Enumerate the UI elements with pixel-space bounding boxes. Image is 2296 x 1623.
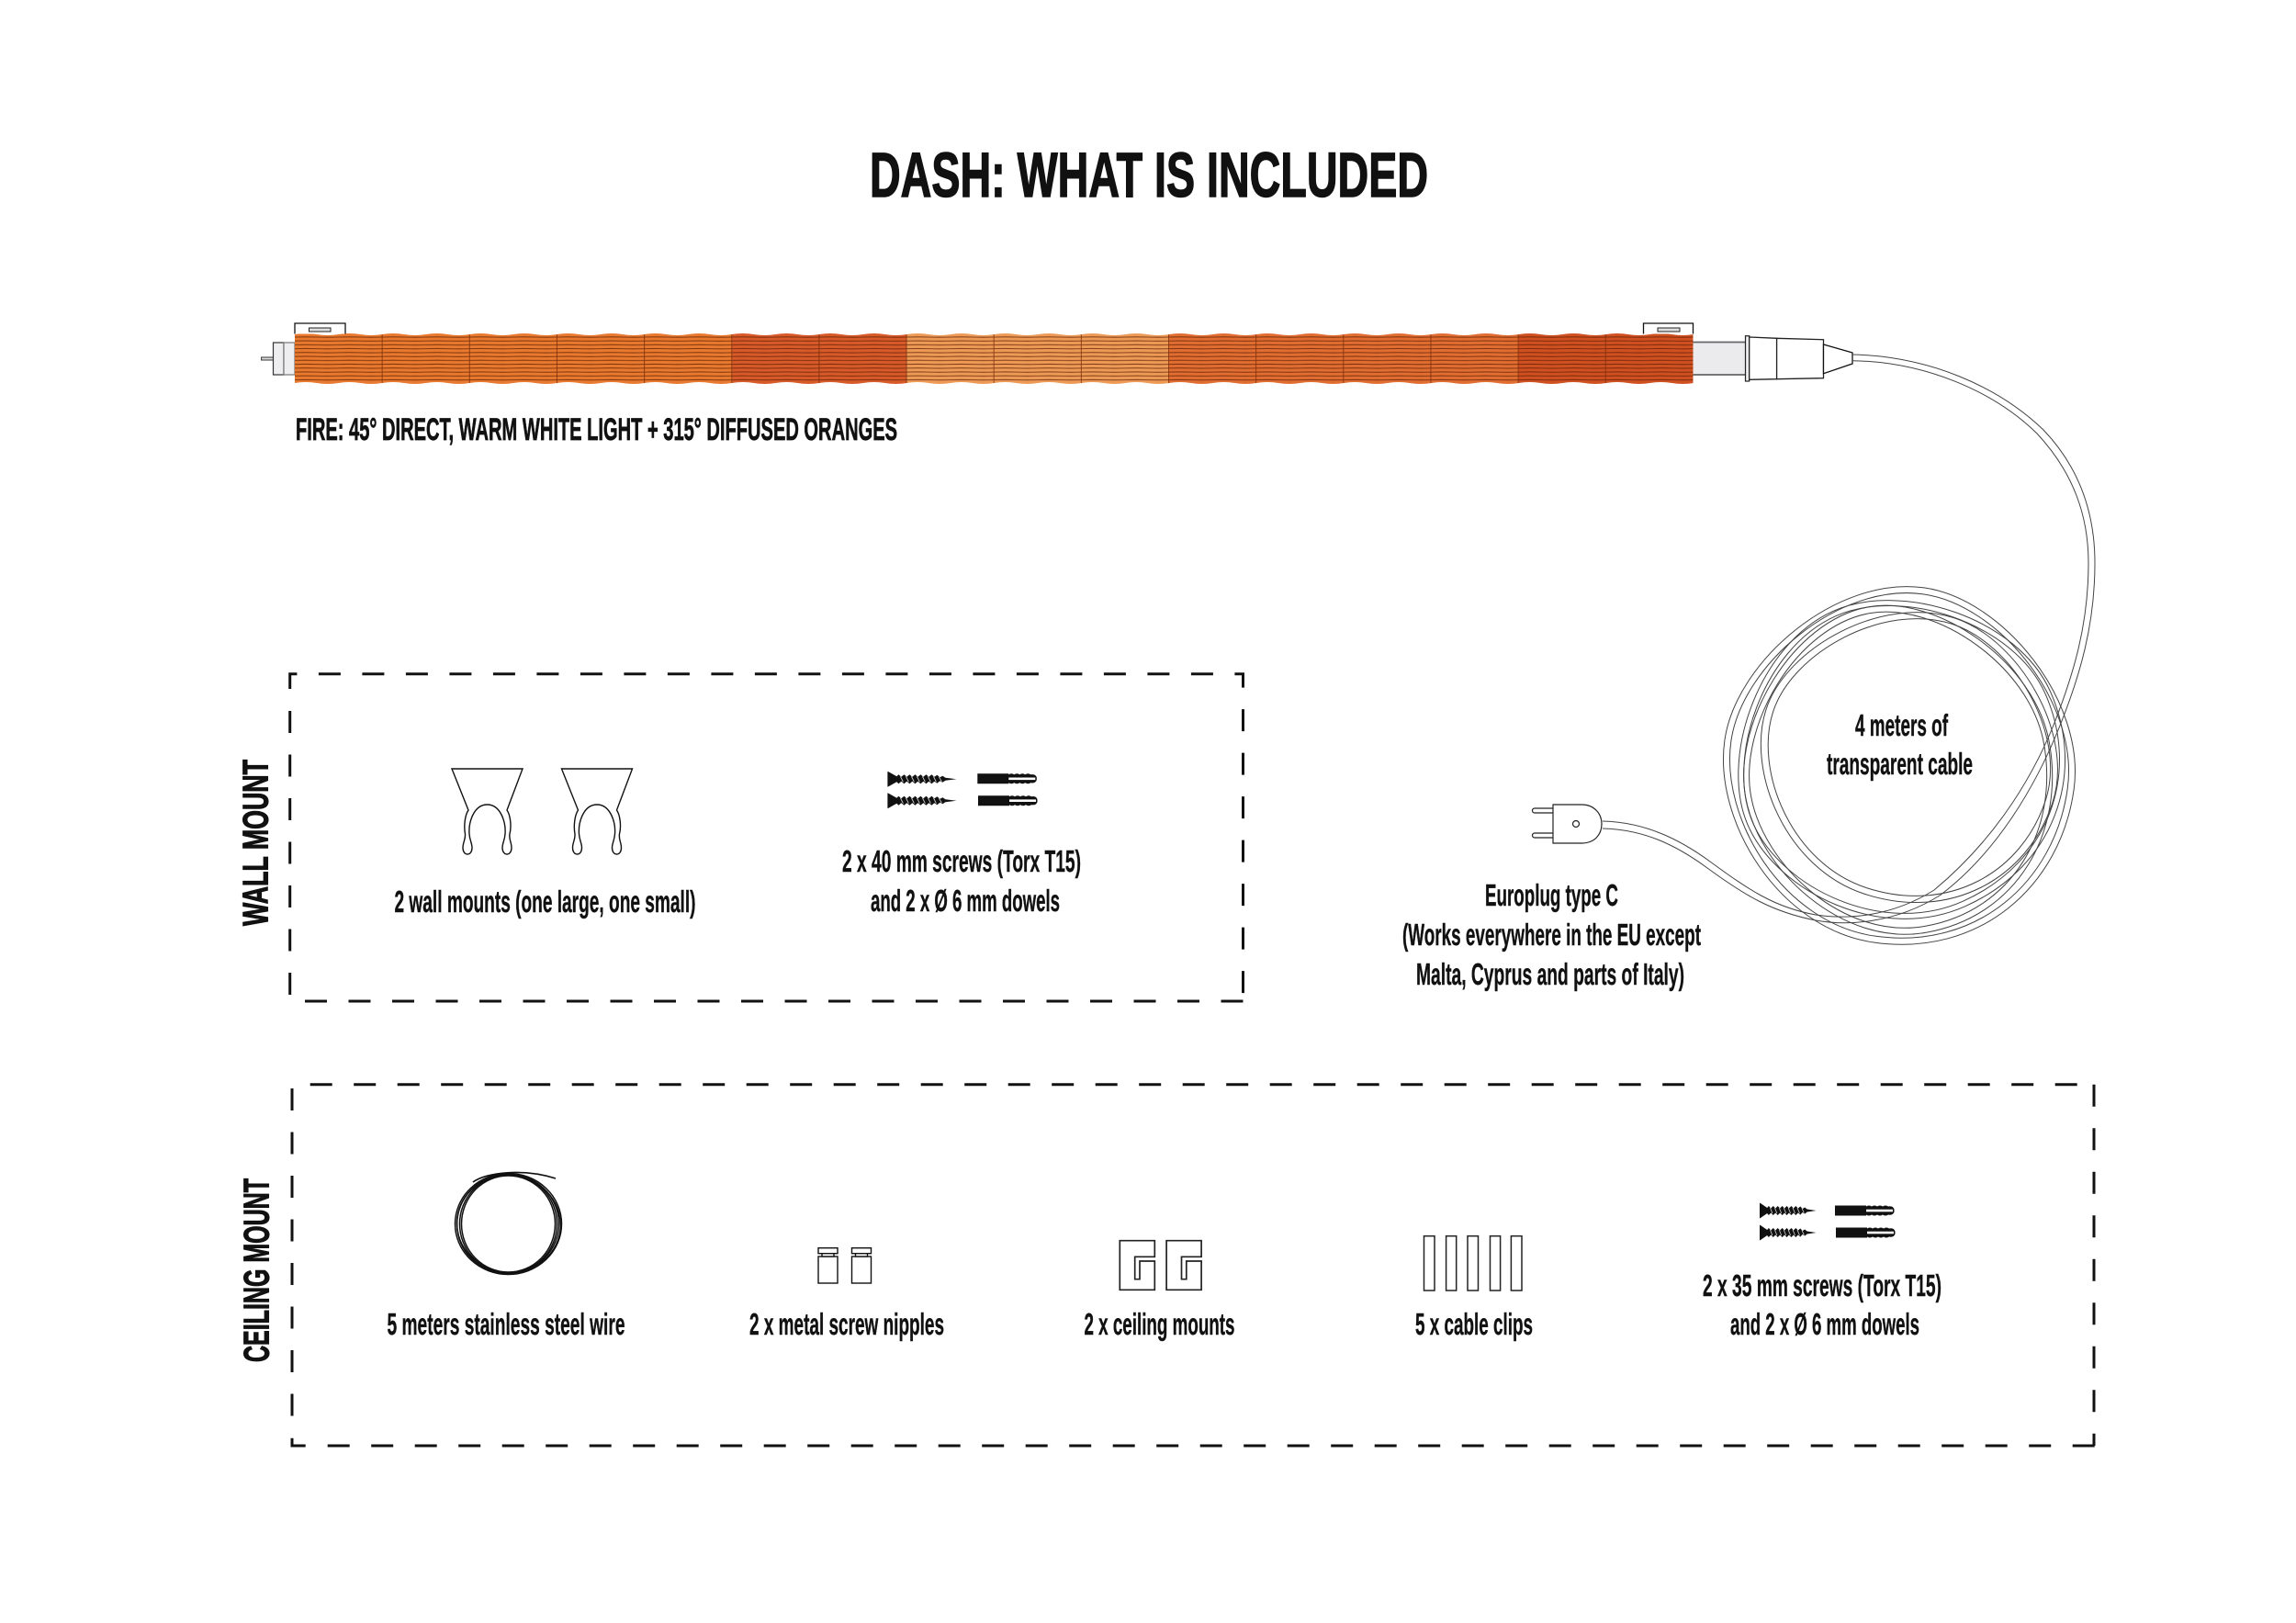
label: ceiling mounts: 2 x ceiling mounts (1084, 1307, 1234, 1341)
icon: wall mounts (452, 769, 632, 854)
panel: ceiling mount (292, 1085, 2095, 1446)
label: cable clips: 5 x cable clips (1415, 1307, 1533, 1341)
icon: screw nipples (818, 1248, 871, 1283)
transparent cable running to plug (1603, 355, 2095, 923)
title: DASH: WHAT IS INCLUDED (870, 140, 1428, 210)
orange segments (295, 332, 1694, 385)
callout: europlug: Malta, Cyprus and parts of Italy) (1416, 957, 1684, 991)
callout: europlug: (Works everywhere in the EU except (1402, 918, 1701, 952)
coiled cable loops (1683, 544, 2116, 974)
icon: ceiling mounts (1120, 1241, 1201, 1290)
callout: europlug: Europlug type C (1485, 878, 1618, 912)
product caption: fire light setting: FIRE: 45° DIRECT, WARM WHITE LIGHT + 315° DIFFUSED ORANGES (296, 412, 897, 447)
icon: cable clips (1424, 1236, 1522, 1291)
label: screw nipples: 2 x metal screw nipples (749, 1307, 944, 1341)
callout: europlug (1402, 878, 1701, 991)
icon: screws and dowels (1760, 1203, 1896, 1240)
label: ceiling screws and dowels: and 2 x Ø 6 mm dowels (1730, 1307, 1919, 1341)
right mounting bracket (1644, 323, 1694, 334)
callout: cable length: 4 meters of (1855, 708, 1949, 742)
panel: wall mount (290, 674, 1244, 1001)
heading: ceiling mount: CEILING MOUNT (237, 1178, 277, 1362)
label: ceiling screws and dowels (1703, 1268, 1941, 1341)
product: dash light tube with coloured segments (262, 323, 1694, 385)
left end connector and pin (262, 343, 295, 375)
heading: wall mount: WALL MOUNT (237, 760, 276, 926)
label: wall screws and dowels: and 2 x Ø 6 mm dowels (871, 884, 1060, 918)
icon: europlug type C (1532, 805, 1602, 843)
label: ceiling screws and dowels: 2 x 35 mm screws (Torx T15) (1703, 1268, 1941, 1302)
label: wall screws and dowels (842, 844, 1081, 918)
label: wall mounts: 2 wall mounts (one large, one small) (395, 885, 696, 919)
icon: steel wire coil (451, 1168, 567, 1279)
left mounting bracket (295, 323, 345, 334)
callout: cable length (1827, 708, 1973, 781)
label: wall screws and dowels: 2 x 40 mm screws (Torx T15) (842, 844, 1081, 878)
callout: cable length: transparent cable (1827, 747, 1973, 781)
icon: screws and dowels (887, 772, 1038, 808)
right end plug connector (1694, 336, 1852, 381)
label: steel wire: 5 meters stainless steel wire (388, 1307, 625, 1341)
